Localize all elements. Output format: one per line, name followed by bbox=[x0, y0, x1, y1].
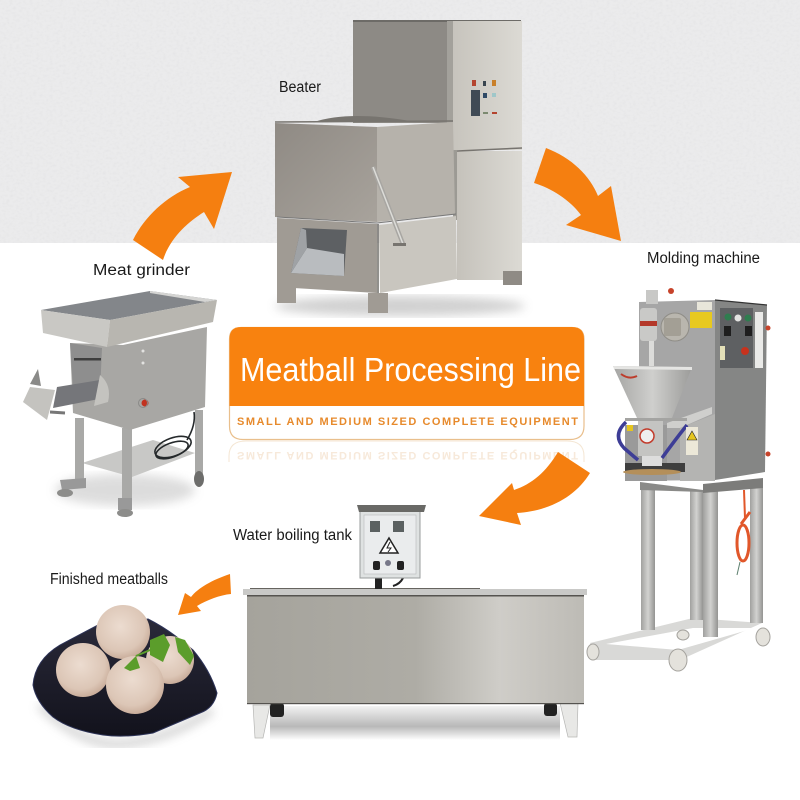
title card bbox=[229, 327, 584, 462]
black plate bbox=[33, 619, 217, 736]
grinder cable bbox=[152, 412, 194, 462]
beater lever bbox=[373, 167, 406, 246]
meatball: left bbox=[56, 643, 110, 697]
molding right panel bbox=[715, 300, 770, 480]
tank floor shadow bbox=[270, 706, 560, 740]
arrow: grinder to beater bbox=[133, 172, 232, 260]
machine: water boiling tank bbox=[243, 505, 587, 740]
molding top cylinder bbox=[640, 288, 674, 366]
label: beater: Beater bbox=[279, 79, 321, 96]
tank wheels bbox=[270, 703, 557, 717]
molding power cord bbox=[737, 490, 750, 575]
molding outlet column bbox=[623, 418, 687, 475]
arrow: molding machine to tank bbox=[479, 452, 590, 525]
beater lower front bbox=[277, 214, 522, 313]
grinder cutting head bbox=[23, 369, 65, 420]
meatball: back right bbox=[146, 636, 194, 684]
molding blue hoses bbox=[618, 422, 687, 460]
grinder hopper bbox=[41, 291, 217, 347]
label: meat grinder: Meat grinder bbox=[93, 262, 190, 279]
title card reflection bbox=[229, 441, 584, 462]
tank control box bbox=[357, 505, 426, 589]
molding main body bbox=[625, 300, 715, 481]
meatball: front bbox=[106, 656, 164, 714]
molding funnel hopper bbox=[613, 366, 692, 418]
parsley garnish bbox=[124, 634, 194, 671]
label: water boiling tank: Water boiling tank bbox=[233, 527, 352, 544]
title card reflection: SMALL AND MEDIUM SIZED COMPLETE EQUIPMENT bbox=[237, 449, 578, 461]
machine: molding machine bbox=[587, 288, 770, 671]
molding warning sign bbox=[627, 425, 698, 455]
molding stand bbox=[590, 478, 763, 660]
label: molding machine: Molding machine bbox=[647, 250, 760, 267]
beater lower right cabinet bbox=[453, 148, 522, 280]
main title: Meatball Processing Line bbox=[240, 351, 581, 388]
beater control panel bbox=[471, 80, 497, 116]
grinder power button bbox=[138, 350, 148, 408]
tank body bbox=[243, 588, 587, 704]
arrow: tank to finished meatballs bbox=[178, 574, 231, 615]
grinder legs and shelf bbox=[57, 410, 204, 517]
machine: beater bbox=[275, 20, 525, 316]
molding wheels bbox=[587, 628, 770, 671]
molding labels and gear bbox=[661, 302, 712, 341]
label: finished meatballs: Finished meatballs bbox=[50, 571, 168, 588]
grinder body bbox=[70, 327, 207, 430]
arrow: beater to molding machine bbox=[534, 148, 621, 241]
machine: meat grinder bbox=[23, 291, 217, 517]
subtitle: SMALL AND MEDIUM SIZED COMPLETE EQUIPMENT bbox=[237, 416, 578, 428]
beater upper housing bbox=[314, 20, 522, 150]
grinder neck and barrel bbox=[53, 343, 109, 408]
beater hopper housing bbox=[275, 121, 455, 222]
tank legs bbox=[253, 703, 578, 738]
meatball: back bbox=[96, 605, 150, 659]
textured wall background bbox=[0, 0, 800, 243]
beater discharge chute bbox=[291, 228, 347, 276]
finished meatballs plate bbox=[33, 605, 217, 744]
